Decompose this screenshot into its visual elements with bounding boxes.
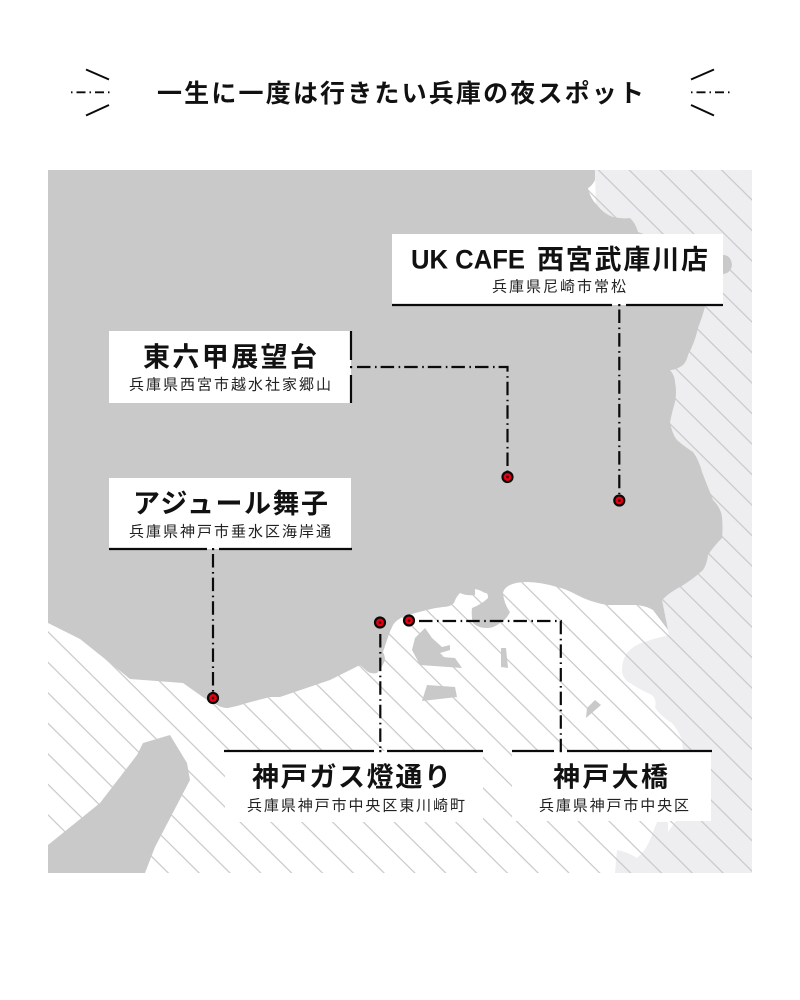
map: awaji island [48, 735, 190, 873]
label: 東六甲展望台: 兵庫県西宮市越水社家郷山 [129, 376, 331, 394]
map: airport island [422, 685, 457, 701]
label: アジュール舞子: 兵庫県神戸市垂水区海岸通 [129, 524, 331, 540]
map: port island [412, 628, 462, 668]
label: 神戸ガス燈通り: 兵庫県神戸市中央区東川崎町 [247, 798, 465, 814]
map: small island [501, 648, 508, 668]
label: 神戸大橋 [512, 750, 712, 821]
label: 神戸ガス燈通り: 神戸ガス燈通り [252, 762, 451, 792]
label: 東六甲展望台 [109, 331, 352, 403]
marker: 東六甲展望台 [502, 472, 512, 482]
label: UK CAFE 西宮武庫川店: UK CAFE [411, 244, 525, 274]
map: sea hatching [48, 170, 752, 873]
marker: UK CAFE [614, 496, 624, 506]
label: 神戸大橋: 神戸大橋 [553, 762, 668, 792]
leader: 神戸大橋 [419, 621, 561, 757]
map: small islet [586, 700, 601, 718]
label: UK CAFE 西宮武庫川店: 西宮武庫川店 [537, 245, 708, 275]
title decoration: left rays [71, 70, 110, 116]
marker: 神戸ガス燈通り [375, 618, 385, 628]
leader: アジュール舞子 [212, 554, 214, 692]
title decoration: right rays [691, 70, 730, 116]
label: UK CAFE 西宮武庫川店 [392, 234, 723, 306]
label: アジュール舞子 [109, 478, 352, 550]
label: 神戸大橋: 兵庫県神戸市中央区 [539, 798, 689, 814]
label: 神戸ガス燈通り [224, 750, 483, 822]
label: アジュール舞子: アジュール舞子 [133, 489, 328, 519]
leader: 神戸ガス燈通り [379, 634, 381, 757]
map: mainland [48, 170, 732, 708]
map: light gray neighbouring area [595, 170, 752, 873]
marker: アジュール舞子 [208, 693, 218, 703]
panel: map [48, 170, 752, 873]
label: 東六甲展望台: 東六甲展望台 [143, 342, 317, 372]
leader: UK CAFE [618, 310, 620, 494]
marker: 神戸大橋 [404, 616, 414, 626]
leader: 東六甲展望台 [357, 367, 508, 471]
title: 一生に一度は行きたい兵庫の夜スポット [157, 80, 644, 108]
label: UK CAFE 西宮武庫川店: 兵庫県尼崎市常松 [492, 278, 626, 296]
